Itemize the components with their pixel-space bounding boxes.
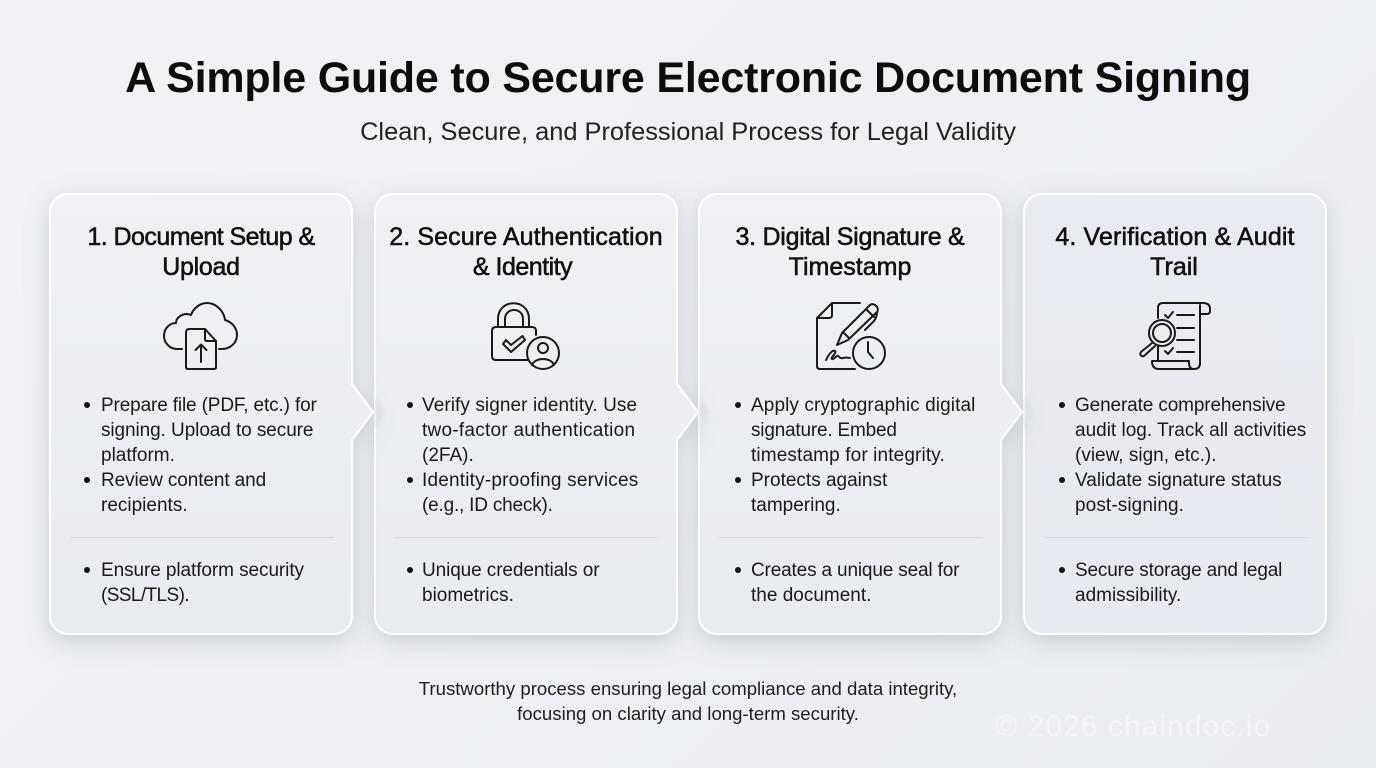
step 4 text: Secure storage and legal (1075, 560, 1282, 581)
watermark: © 2026 chaindoc.io (995, 710, 1271, 743)
step 3 text: 3. Digital Signature & (736, 223, 964, 251)
step 4 text: audit log. Track all activities (1075, 420, 1306, 441)
step 3 text: signature. Embed (751, 420, 897, 441)
step 1 text (84, 223, 317, 606)
step 1 text: (SSL/TLS). (101, 585, 189, 606)
step 4 text (1055, 223, 1306, 606)
step 2 text: 2. Secure Authentication (389, 223, 663, 251)
step 4 text: Validate signature status (1075, 470, 1282, 491)
step 4 text: (view, sign, etc.). (1075, 445, 1216, 466)
step 1 text: Upload (162, 253, 240, 281)
panel: step 3 card (699, 194, 1022, 634)
step 3 text: Apply cryptographic digital (751, 395, 975, 416)
step 1 text: recipients. (101, 495, 188, 516)
icon: cloud upload document (164, 303, 237, 369)
step 4 text: post-signing. (1075, 495, 1184, 516)
step 3 text: Timestamp (789, 253, 911, 281)
step 2 text: two-factor authentication (422, 420, 635, 441)
step 2 text: Identity-proofing services (422, 470, 638, 491)
footer note (419, 678, 957, 724)
step 4 text: admissibility. (1075, 585, 1181, 606)
step 1 text: platform. (101, 445, 175, 466)
panel: step 1 card (50, 194, 373, 634)
footer note: focusing on clarity and long-term security. (517, 703, 859, 724)
subtitle: Clean, Secure, and Professional Process for Legal Validity (360, 118, 1016, 146)
panel: step 2 card (375, 194, 698, 634)
step 3 text: Creates a unique seal for (751, 560, 959, 581)
step 3 text: timestamp for integrity. (751, 445, 945, 466)
step 2 text (389, 223, 663, 606)
step 2 text: & Identity (473, 253, 572, 281)
step 2 text: Verify signer identity. Use (422, 395, 637, 416)
footer note: Trustworthy process ensuring legal compliance and data integrity, (419, 678, 957, 699)
step 1 text: Prepare file (PDF, etc.) for (101, 395, 317, 416)
step 2 text: (e.g., ID check). (422, 495, 553, 516)
icon: padlock with check and user (492, 303, 559, 369)
step 4 text: Generate comprehensive (1075, 395, 1285, 416)
step 1 text: Review content and (101, 470, 266, 491)
step 3 text: Protects against (751, 470, 887, 491)
step 3 text (735, 223, 975, 606)
step 2 text: biometrics. (422, 585, 514, 606)
step 2 text: Unique credentials or (422, 560, 599, 581)
panel: step 4 card (1024, 194, 1326, 634)
step 1 text: signing. Upload to secure (101, 420, 313, 441)
icon: signed document with pen and clock (817, 303, 885, 369)
step 2 text: (2FA). (422, 445, 474, 466)
step 4 text: Trail (1150, 253, 1198, 281)
title: A Simple Guide to Secure Electronic Document Signing (125, 54, 1251, 102)
step 1 text: 1. Document Setup & (87, 223, 315, 251)
icon: audit scroll with magnifier (1140, 303, 1210, 369)
step 1 text: Ensure platform security (101, 560, 304, 581)
step 3 text: the document. (751, 585, 871, 606)
step 4 text: 4. Verification & Audit (1055, 223, 1295, 251)
step 3 text: tampering. (751, 495, 841, 516)
